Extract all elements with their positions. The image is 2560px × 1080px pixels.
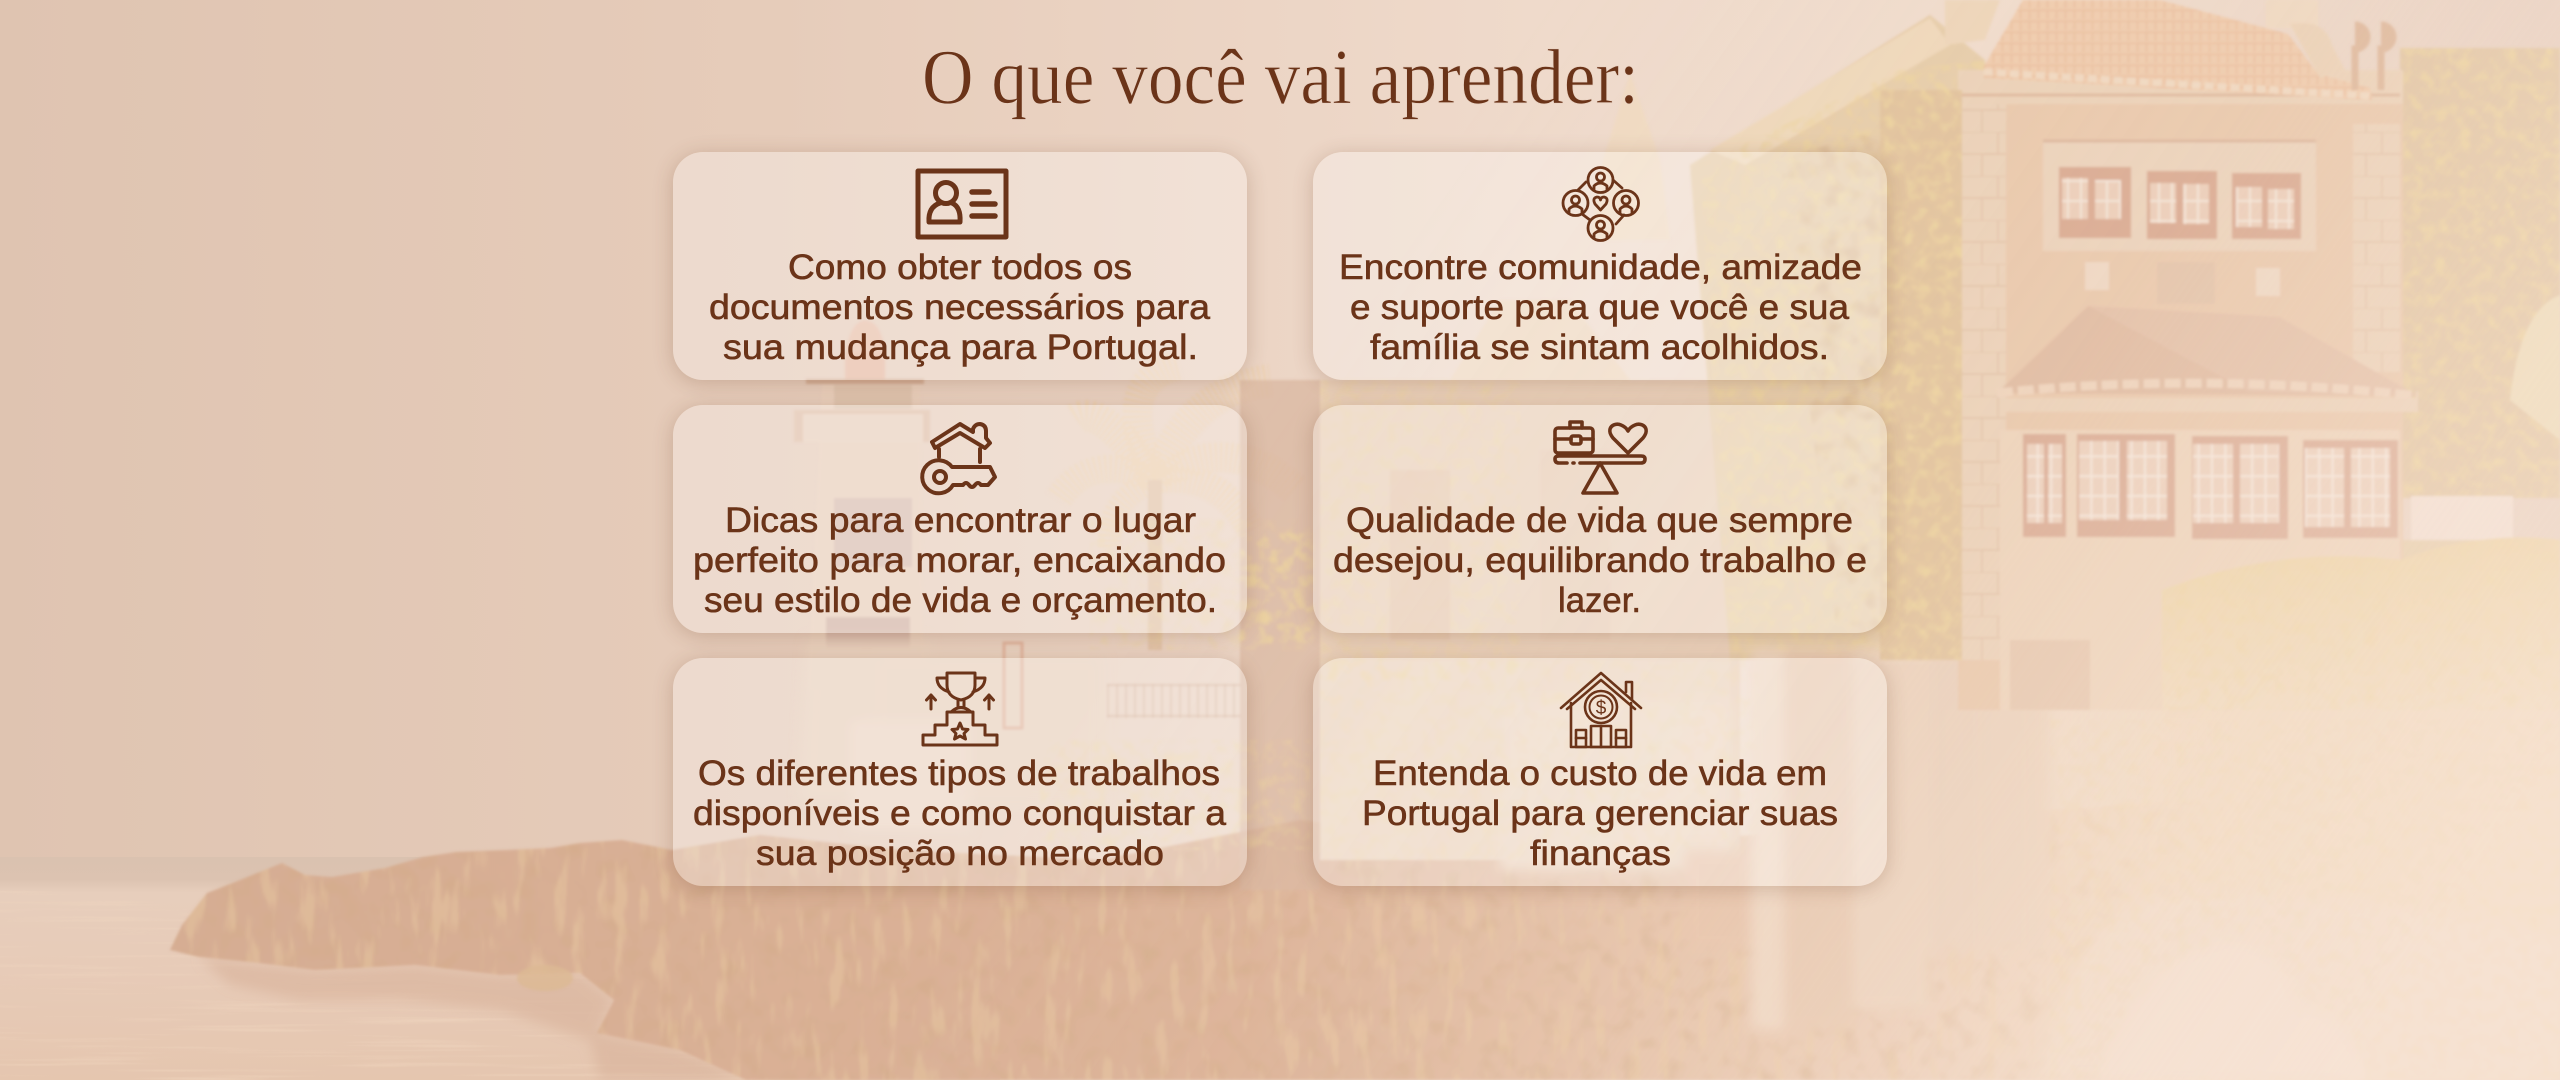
text: trabalho — [693, 754, 1227, 873]
icon: house and key — [922, 424, 995, 493]
text: moradia: seu estilo de vida e orçamento. — [704, 581, 1217, 620]
panel: comunidade — [1313, 152, 1887, 380]
text: documentos: documentos necessários para — [709, 288, 1211, 327]
panel: qualidade de vida — [1313, 405, 1887, 633]
columns below ivy — [1685, 650, 2050, 1030]
panel: documentos — [673, 152, 1247, 380]
text: qualidade de vida: Qualidade de vida que sempre — [1346, 501, 1853, 540]
text: qualidade de vida: desejou, equilibrando trabalho e — [1333, 541, 1867, 580]
icon: house with coin: $ — [1596, 698, 1607, 719]
text: moradia: perfeito para morar, encaixando — [693, 541, 1226, 580]
panel: trabalho — [673, 658, 1247, 886]
panel: custo de vida — [1313, 658, 1887, 886]
text: comunidade: família se sintam acolhidos. — [1370, 328, 1829, 367]
text: moradia: Dicas para encontrar o lugar — [725, 501, 1196, 540]
text: documentos: Como obter todos os — [788, 248, 1132, 287]
text: custo de vida — [1362, 754, 1838, 873]
text: trabalho: sua posição no mercado — [756, 834, 1164, 873]
upper roof — [1945, 0, 2393, 100]
text: trabalho: disponíveis e como conquistar a — [693, 794, 1227, 833]
central vines and walls — [1040, 73, 1890, 890]
text: documentos — [709, 248, 1211, 367]
text: comunidade: e suporte para que você e sua — [1350, 288, 1850, 327]
text: documentos: sua mudança para Portugal. — [723, 328, 1198, 367]
text: qualidade de vida: lazer. — [1558, 581, 1641, 620]
icon: balance of work and heart — [1555, 422, 1646, 493]
icon: house with coin — [1561, 673, 1641, 747]
lower roof — [1997, 306, 2418, 412]
text: qualidade de vida — [1333, 501, 1867, 620]
main mansion — [1958, 70, 2403, 710]
text: custo de vida: finanças — [1530, 834, 1671, 873]
text: custo de vida: Portugal para gerenciar suas — [1362, 794, 1838, 833]
text: trabalho: Os diferentes tipos de trabalhos — [698, 754, 1220, 793]
lighthouse — [794, 320, 1103, 830]
ivy covered wing — [1690, 15, 1985, 660]
text: comunidade: Encontre comunidade, amizade — [1339, 248, 1862, 287]
bushes and lower vegetation — [1880, 538, 2560, 1080]
icon: trophy on podium — [923, 673, 997, 745]
red tower and fence — [1004, 643, 1241, 728]
panel: moradia — [673, 405, 1247, 633]
right tree — [2400, 48, 2560, 580]
title: O que você vai aprender: — [922, 33, 1639, 120]
text: comunidade — [1339, 248, 1862, 367]
left rocks and cliff — [170, 790, 2560, 1080]
left ivy on mansion — [1880, 90, 1962, 660]
icon: community circle — [1563, 168, 1638, 240]
text: moradia — [693, 501, 1226, 620]
sea — [0, 857, 1000, 1080]
text: custo de vida: Entenda o custo de vida em — [1373, 754, 1827, 793]
lower windows — [2010, 434, 2398, 710]
palm tree — [1058, 365, 1295, 650]
icon: id card — [918, 171, 1006, 237]
